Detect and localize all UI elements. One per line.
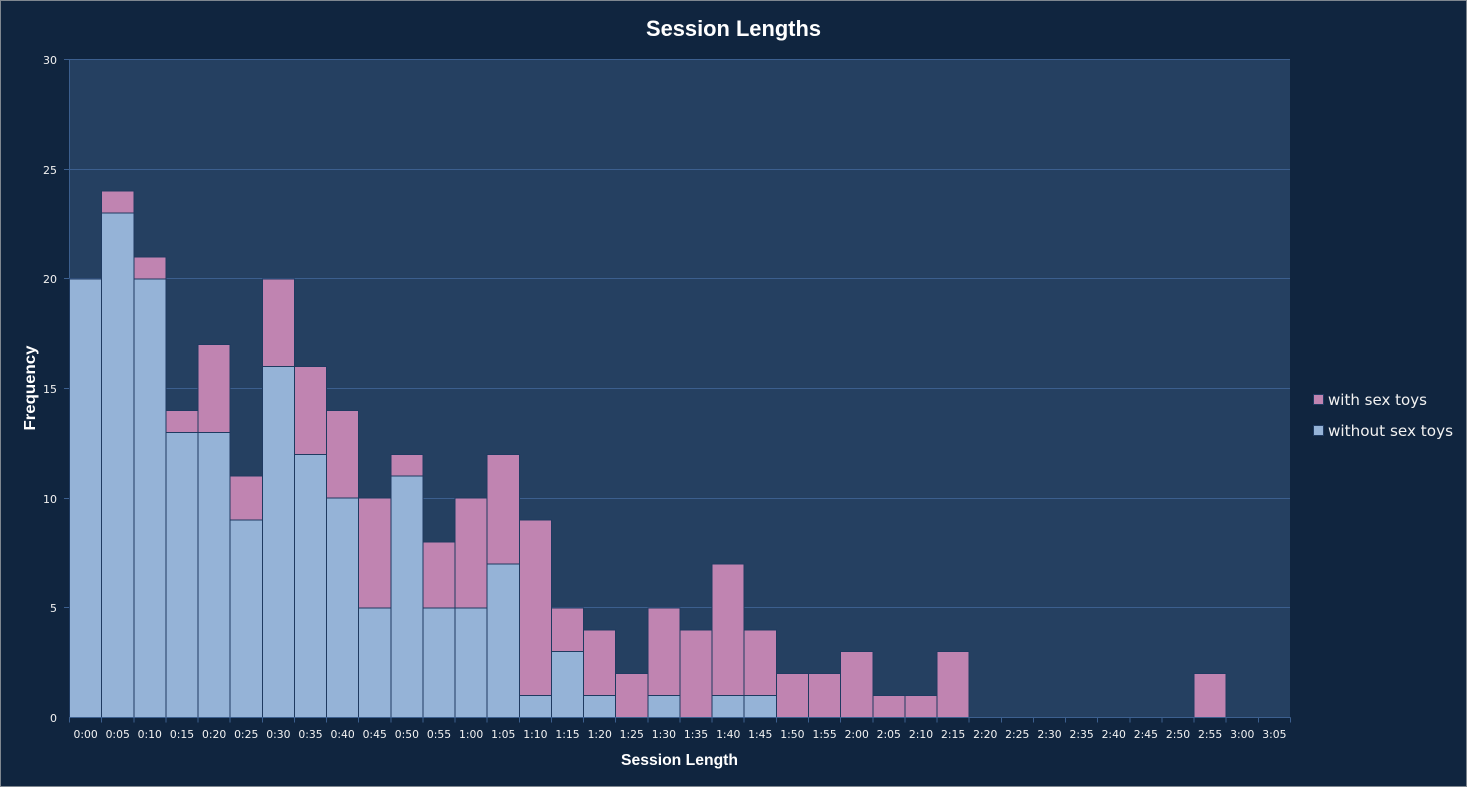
plot area <box>69 60 1290 718</box>
x axis labels: 1:55 <box>812 728 837 741</box>
y axis labels: 25 <box>43 164 57 177</box>
x axis labels: 2:25 <box>1005 728 1029 741</box>
x axis labels: 2:10 <box>909 728 933 741</box>
x axis labels: 3:05 <box>1262 728 1287 741</box>
legend item: without sex toys: without sex toys <box>1328 422 1453 440</box>
x axis labels: 0:00 <box>73 728 98 741</box>
x axis title: Session Length <box>621 752 738 769</box>
x axis labels: 0:25 <box>234 728 258 741</box>
x axis labels: 1:10 <box>523 728 548 741</box>
y axis labels <box>43 54 57 725</box>
x axis labels: 0:35 <box>298 728 323 741</box>
x axis labels: 2:40 <box>1102 728 1126 741</box>
x axis labels: 2:05 <box>877 728 901 741</box>
x axis labels: 0:20 <box>202 728 226 741</box>
x axis labels <box>73 728 1287 741</box>
x axis labels: 2:20 <box>973 728 997 741</box>
x axis labels: 1:40 <box>716 728 740 741</box>
x axis labels: 0:15 <box>170 728 194 741</box>
x axis labels: 0:30 <box>266 728 291 741</box>
y axis labels: 10 <box>43 493 57 506</box>
y axis labels: 0 <box>50 712 57 725</box>
x axis labels: 1:45 <box>748 728 772 741</box>
x axis labels: 0:50 <box>395 728 419 741</box>
series: without sex toys <box>70 213 776 718</box>
x axis labels: 0:45 <box>363 728 387 741</box>
x axis labels: 1:20 <box>588 728 612 741</box>
x axis labels: 0:05 <box>106 728 130 741</box>
series: with sex toys <box>102 191 1226 718</box>
x axis labels: 2:00 <box>845 728 869 741</box>
y axis labels: 20 <box>43 273 57 286</box>
x axis labels: 1:00 <box>459 728 483 741</box>
x axis labels: 2:45 <box>1134 728 1158 741</box>
x axis labels: 2:15 <box>941 728 965 741</box>
x axis labels: 2:30 <box>1037 728 1062 741</box>
x axis labels: 0:40 <box>330 728 355 741</box>
x axis labels: 2:50 <box>1166 728 1190 741</box>
y axis labels: 30 <box>43 54 57 67</box>
x axis labels: 1:30 <box>652 728 676 741</box>
x axis labels: 1:25 <box>620 728 644 741</box>
y axis labels: 5 <box>50 602 57 615</box>
x axis labels: 0:55 <box>427 728 451 741</box>
x axis labels: 3:00 <box>1230 728 1255 741</box>
x axis labels: 1:50 <box>780 728 805 741</box>
y axis labels: 15 <box>43 383 57 396</box>
x axis labels: 2:55 <box>1198 728 1222 741</box>
x axis labels: 0:10 <box>138 728 162 741</box>
y axis title: Frequency <box>22 345 39 430</box>
x axis labels: 2:35 <box>1069 728 1094 741</box>
title: Session Lengths <box>646 16 821 41</box>
x axis labels: 1:05 <box>491 728 515 741</box>
x axis labels: 1:15 <box>555 728 580 741</box>
legend item: with sex toys: with sex toys <box>1328 391 1427 409</box>
legend <box>1314 391 1453 440</box>
x axis labels: 1:35 <box>684 728 708 741</box>
x axis line and ticks <box>69 718 1290 722</box>
